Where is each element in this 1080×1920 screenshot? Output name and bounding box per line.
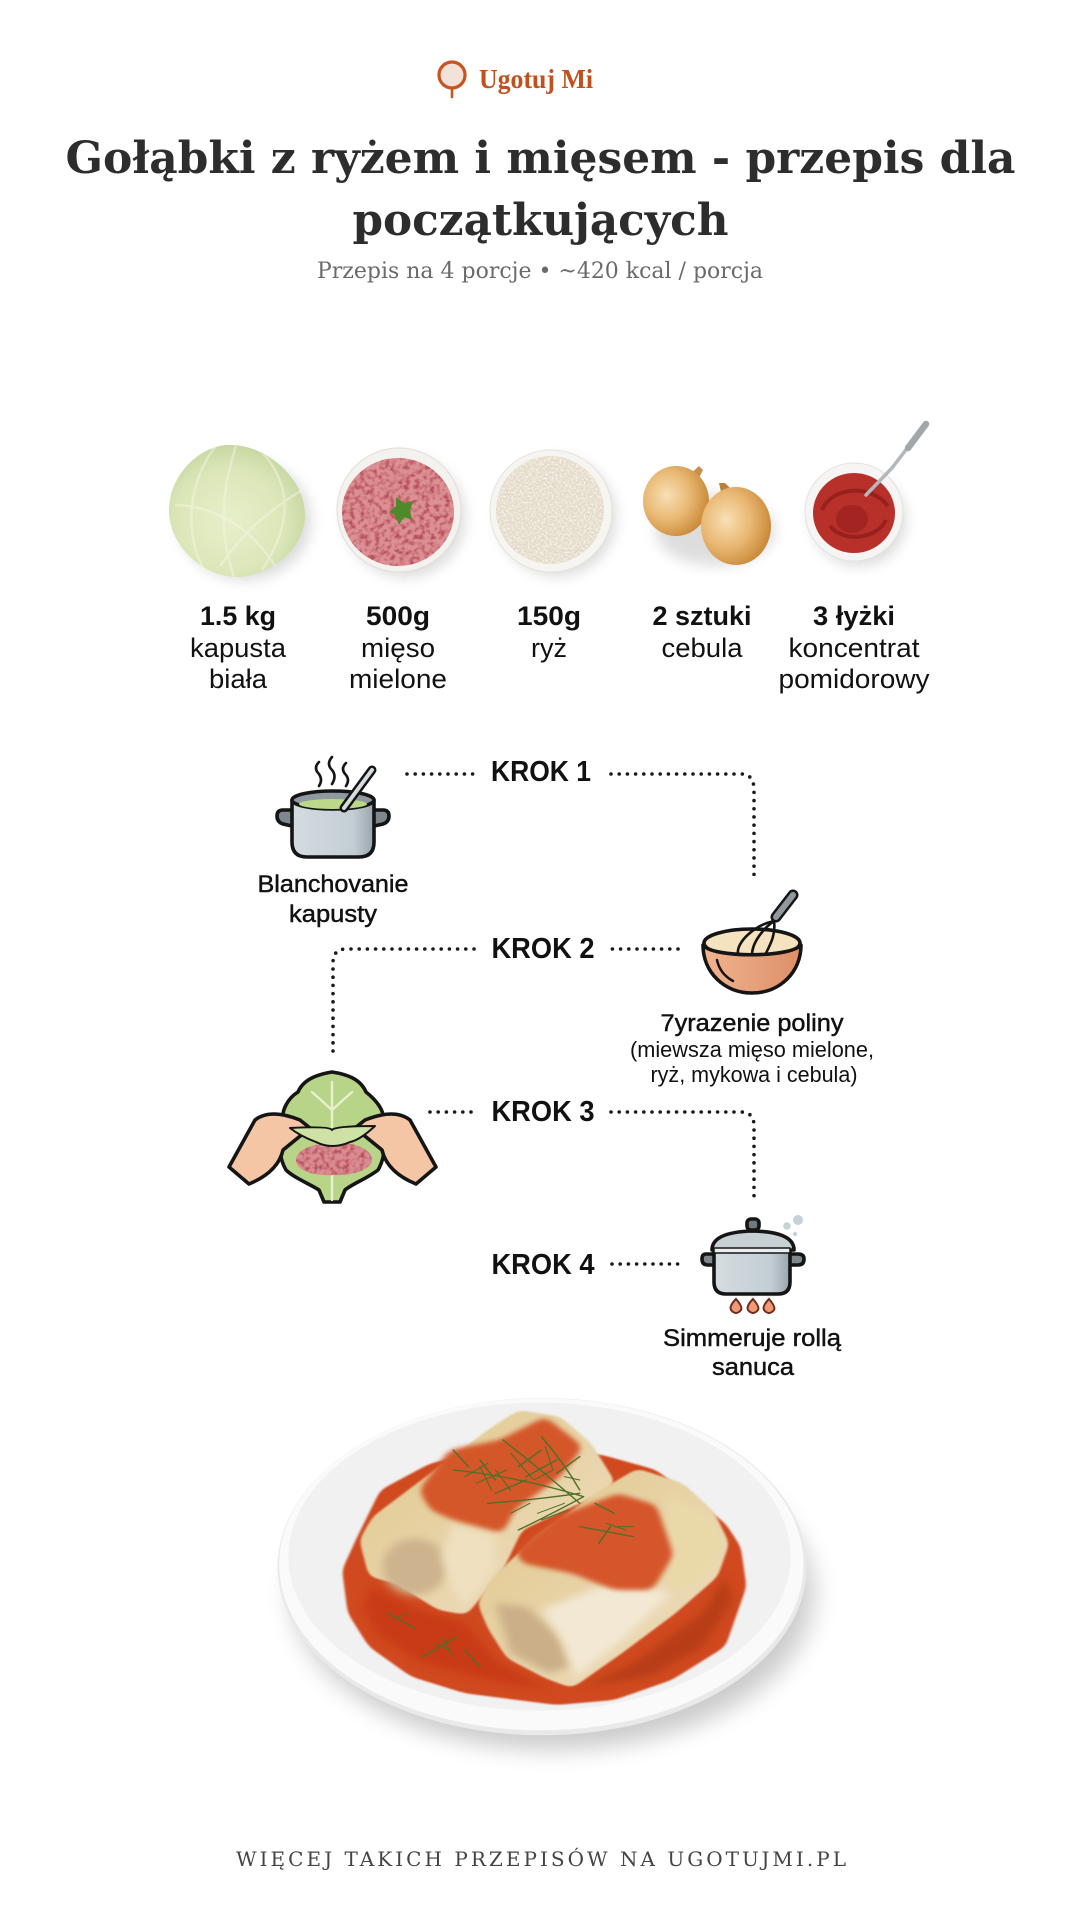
title: początkujących: [352, 195, 728, 246]
tomato sauce: [342, 1443, 747, 1705]
step 4 caption: [663, 1325, 842, 1381]
label: cabbage: 1.5 kg: [200, 601, 276, 631]
step 1 caption: Blanchovanie: [258, 871, 408, 898]
ingredient labels: koncentrat: [788, 633, 920, 663]
plate: [278, 1398, 807, 1735]
KROK 2: KROK 2: [492, 933, 594, 965]
title: [66, 133, 1016, 246]
title: Gołąbki z ryżem i mięsem - przepis dla: [66, 133, 1016, 184]
icon: tomato paste with spoon: [805, 424, 926, 566]
logo: [439, 62, 593, 97]
icon: hands rolling cabbage leaf: [229, 1072, 436, 1202]
step 1 caption: [258, 871, 408, 928]
ingredient labels: biała: [209, 664, 268, 694]
ingredient labels: cebula: [662, 633, 743, 663]
ingredient labels: ryż: [531, 633, 567, 663]
panel: ingredients: [169, 424, 930, 694]
icon: minced meat bowl: [337, 448, 465, 577]
dotted connectors: [333, 774, 754, 1264]
KROK 4: KROK 4: [492, 1249, 594, 1281]
icon: spoon logo: [439, 62, 465, 97]
footer: WIĘCEJ TAKICH PRZEPISÓW NA UGOTUJMI.PL: [236, 1846, 846, 1871]
step 4 caption: sanuca: [712, 1354, 795, 1381]
icon: bowl with whisk: [703, 895, 801, 993]
icon: pot with ladle: [277, 757, 389, 857]
ingredient labels: mięso: [361, 633, 435, 663]
KROK 1: KROK 1: [491, 756, 591, 788]
ingredient labels: mielone: [349, 664, 447, 694]
icon: onions: [643, 466, 775, 566]
icon: rice bowl: [490, 450, 616, 576]
cabbage roll: front: [477, 1468, 729, 1688]
cabbage roll: back: [359, 1410, 616, 1615]
ingredient labels: [190, 601, 930, 694]
plate shadow: [292, 1437, 814, 1750]
dill garnish: [388, 1437, 633, 1667]
step 1 caption: kapusty: [289, 901, 377, 928]
label: tomato paste: 3 łyżki: [813, 601, 895, 631]
icon: cabbage: [169, 445, 311, 580]
label: onion: 2 sztuki: [652, 601, 752, 631]
photo: plate of stuffed cabbage rolls: [278, 1398, 814, 1750]
icon: simmering pot on burner: [702, 1215, 804, 1313]
label: rice: 150g: [517, 601, 581, 631]
subtitle: Przepis na 4 porcje • ~420 kcal / porcja: [317, 259, 763, 284]
step 2 caption: (miewsza mięso mielone,: [630, 1037, 874, 1062]
step 2 caption: 7yrazenie poliny: [660, 1010, 844, 1037]
step 2 caption: [630, 1010, 874, 1087]
ingredient labels: kapusta: [190, 633, 287, 663]
KROK 3: KROK 3: [492, 1096, 594, 1128]
brand name: Ugotuj Mi: [479, 64, 593, 94]
step 2 caption: ryż, mykowa i cebula): [650, 1062, 858, 1087]
ingredient labels: pomidorowy: [778, 664, 930, 694]
panel: steps: [229, 756, 874, 1381]
step 4 caption: Simmeruje rollą: [663, 1325, 842, 1352]
step labels: [491, 756, 594, 1281]
label: meat: 500g: [366, 601, 430, 631]
